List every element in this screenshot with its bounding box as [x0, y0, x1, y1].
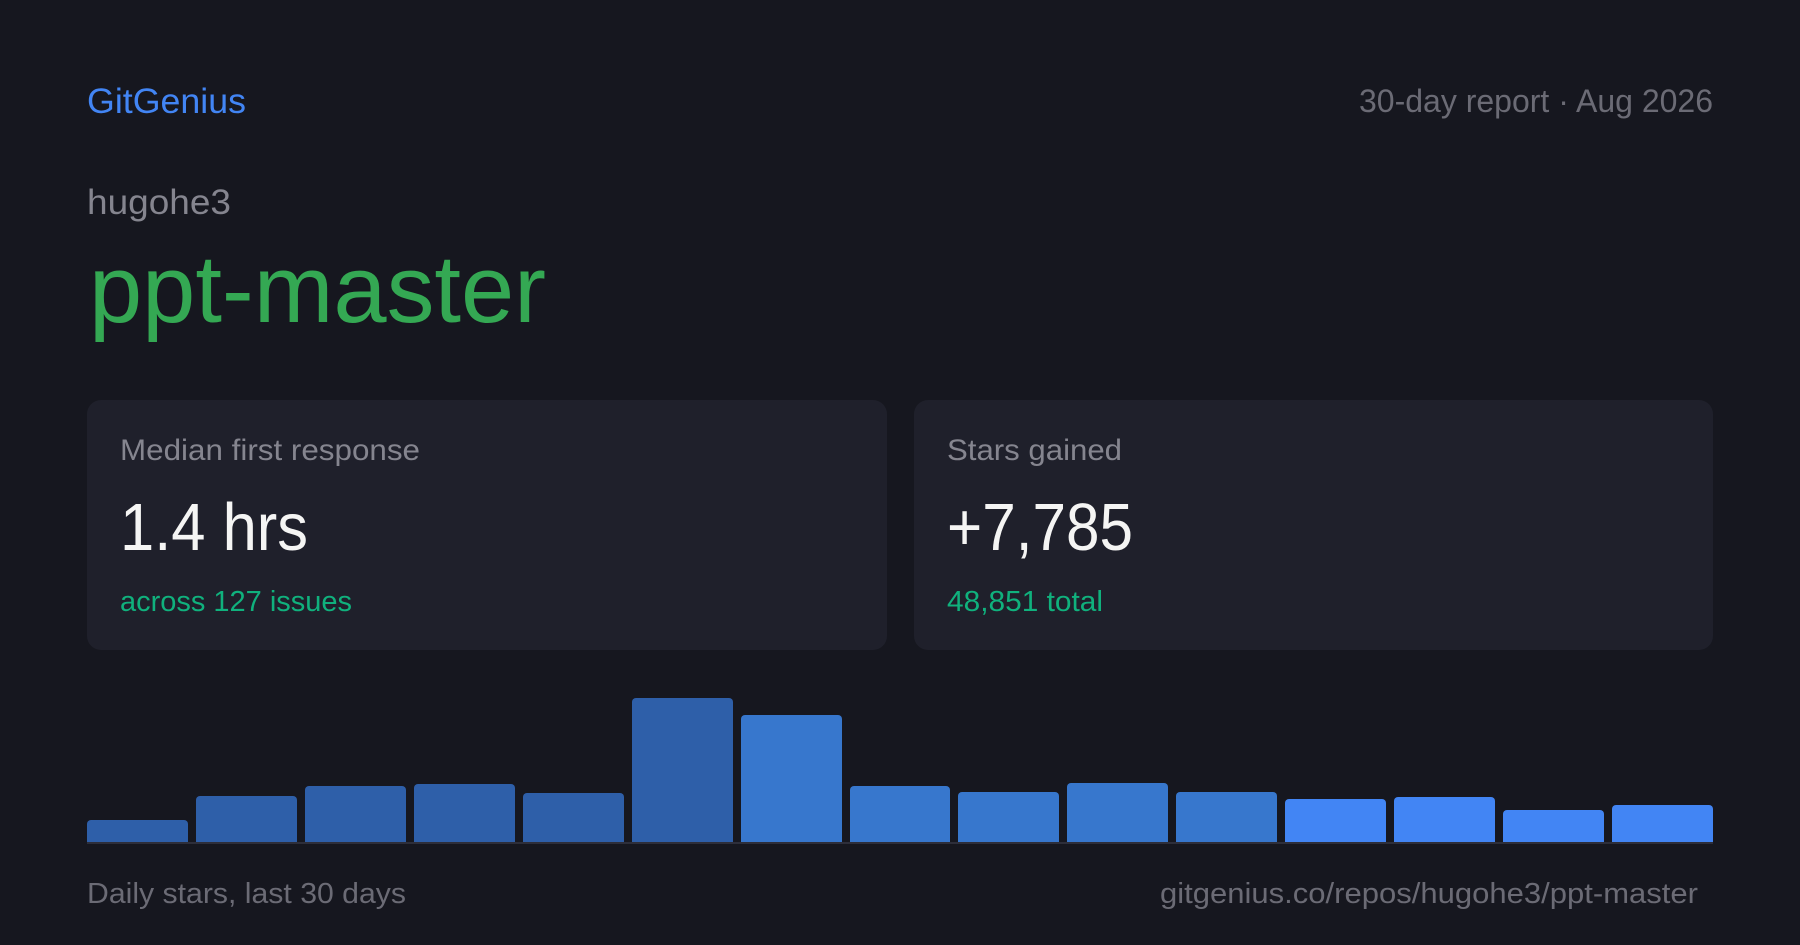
brand name: GitGenius [87, 82, 246, 121]
metric label: Stars gained [947, 434, 1122, 467]
panel: median first response [87, 400, 887, 650]
metric value: 1.4 hrs [120, 490, 308, 565]
bar chart: daily stars [87, 698, 1713, 844]
metric detail: across 127 issues [120, 586, 352, 618]
repository title: ppt-master [89, 236, 546, 343]
metric detail: 48,851 total [947, 586, 1103, 618]
panel: stars gained [914, 400, 1713, 650]
metric label: Median first response [120, 434, 420, 467]
metric value: +7,785 [947, 490, 1133, 565]
chart caption: Daily stars, last 30 days [87, 878, 406, 910]
repository owner: hugohe3 [87, 183, 231, 222]
report period: 30-day report · Aug 2026 [1359, 83, 1713, 119]
repository url: gitgenius.co/repos/hugohe3/ppt-master [1160, 878, 1698, 910]
